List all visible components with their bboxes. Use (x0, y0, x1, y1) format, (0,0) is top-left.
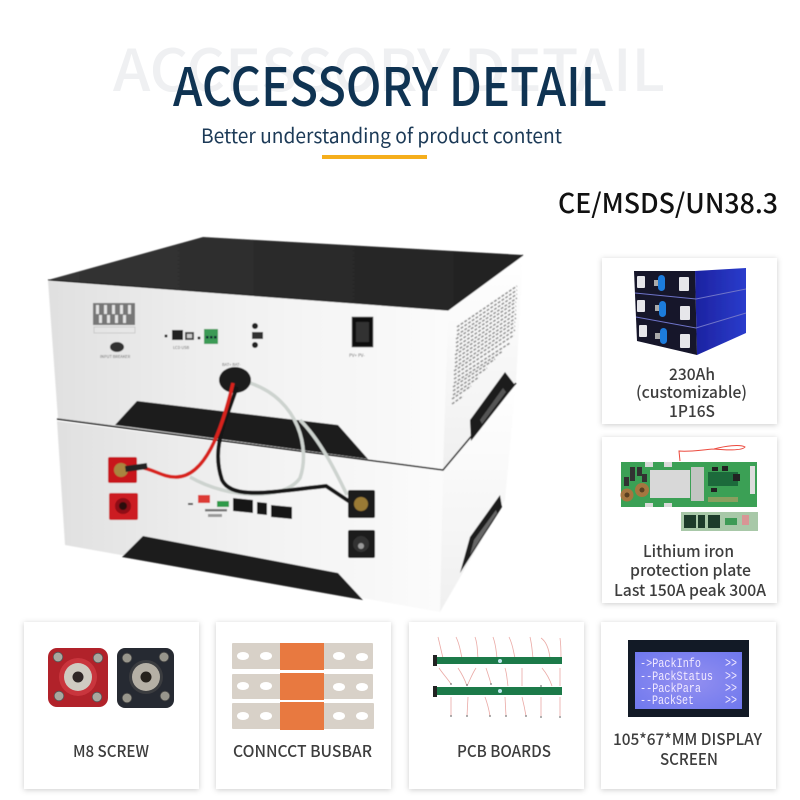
icon: stacked LiFePO4 cells (634, 268, 746, 355)
certification text: CE/MSDS/UN38.3 (558, 182, 778, 221)
icon: LCD display: >> (725, 669, 737, 685)
icon: LCD display: ->PackInfo (640, 656, 701, 671)
panel: protection plate (602, 437, 777, 603)
panel: PCB boards (409, 622, 584, 789)
label: protection plate: protection plate (630, 557, 751, 581)
panel: display screen (601, 622, 776, 789)
panel: connect busbar (216, 622, 391, 789)
label: PCB boards: PCB BOARDS (457, 738, 551, 762)
label: capacity: 1P16S (669, 398, 715, 422)
icon: BMS circuit board (620, 446, 758, 531)
label: capacity (636, 361, 747, 422)
label: display screen: 105*67*MM DISPLAY (613, 726, 762, 750)
battery cabinet product image: BAT+ BAT- (222, 362, 241, 368)
icon: LCD display: >> (725, 681, 737, 697)
yellow accent bar (322, 155, 427, 159)
label: protection plate (614, 538, 766, 601)
label: capacity: 230Ah (669, 361, 715, 385)
icon: LCD display: --PackSet (640, 693, 694, 708)
icon: LCD display: --PackStatus (640, 669, 713, 684)
icon: M8 screw terminals (48, 648, 174, 708)
icon: PCB strips with wires (433, 637, 562, 718)
label: M8 screw: M8 SCREW (73, 738, 149, 762)
panel: cell capacity (602, 258, 777, 424)
label: protection plate: Lithium iron (643, 538, 734, 562)
label: display screen (613, 726, 762, 770)
subtitle: Better understanding of product content (201, 120, 562, 149)
battery cabinet product image (48, 237, 523, 612)
icon: LCD display (628, 640, 749, 717)
label: busbar: CONNCCT BUSBAR (233, 738, 372, 762)
icon: LCD display: >> (725, 656, 737, 672)
icon: busbars (232, 643, 374, 730)
icon: LCD display: >> (725, 693, 737, 709)
panel: M8 screw (24, 622, 199, 789)
battery cabinet product image: INPUT BREAKER (100, 354, 131, 360)
background ghost title: ACCESSORY DETAIL (113, 24, 665, 108)
battery cabinet product image: LCD USB (173, 345, 189, 351)
label: protection plate: Last 150A peak 300A (614, 577, 766, 601)
title: ACCESSORY DETAIL (173, 46, 607, 122)
label: capacity: (customizable) (636, 379, 747, 403)
battery cabinet product image: PV+ PV- (349, 353, 365, 359)
label: display screen: SCREEN (660, 746, 718, 770)
icon: LCD display: --PackPara (640, 681, 701, 696)
